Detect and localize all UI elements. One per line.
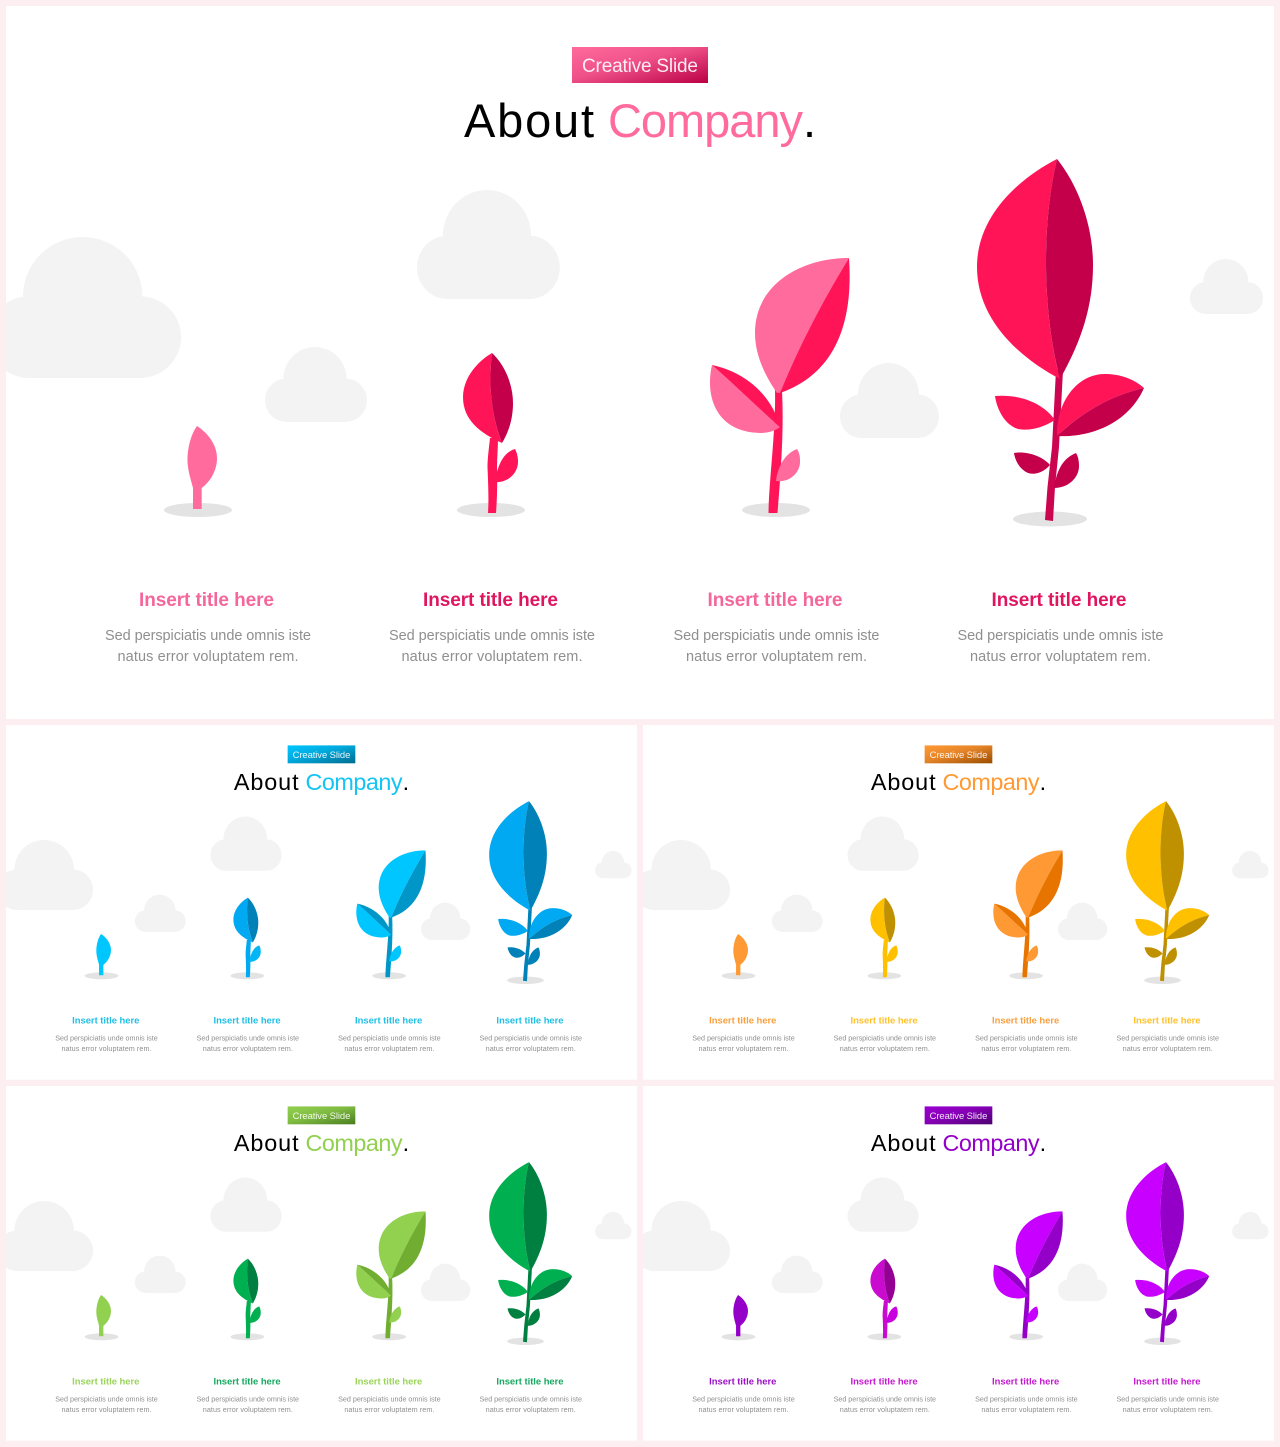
column 1 text: natus error voluptatem rem.: [698, 1405, 789, 1414]
column 2 text: [389, 590, 595, 665]
column 2 text: Sed perspiciatis unde omnis iste: [834, 1033, 936, 1042]
plant stage 2: [230, 898, 264, 979]
plant stage 3: [993, 1211, 1063, 1340]
column 4 text: natus error voluptatem rem.: [1123, 1405, 1213, 1414]
plant stage 4: [977, 159, 1144, 526]
column 1 text: natus error voluptatem rem.: [61, 1405, 152, 1414]
clouds: [634, 1178, 1268, 1301]
column 1 text: Sed perspiciatis unde omnis iste: [55, 1394, 158, 1403]
column 2 text: Insert title here: [213, 1016, 281, 1027]
column 1 text: Insert title here: [709, 1016, 776, 1027]
column 4 text: natus error voluptatem rem.: [1123, 1044, 1213, 1053]
plant stage 2: [867, 1259, 901, 1340]
tag: Creative Slide: [925, 1106, 992, 1124]
column 2 text: Sed perspiciatis unde omnis iste: [197, 1033, 299, 1042]
column 4 text: Insert title here: [1133, 1377, 1201, 1388]
column 2 text: natus error voluptatem rem.: [203, 1405, 293, 1414]
column 1 text: Insert title here: [72, 1016, 139, 1027]
column 2 text: Sed perspiciatis unde omnis iste: [389, 628, 595, 644]
column 3 text: natus error voluptatem rem.: [981, 1405, 1071, 1414]
clouds: [634, 817, 1268, 940]
column 4 text: natus error voluptatem rem.: [970, 649, 1151, 665]
title: About: [234, 1130, 299, 1156]
column 3 text: Insert title here: [355, 1377, 422, 1388]
column 4 text: Sed perspiciatis unde omnis iste: [958, 628, 1164, 644]
title: .: [403, 1130, 409, 1156]
column 4 text: Insert title here: [496, 1377, 564, 1388]
column 4 text: [1116, 1377, 1219, 1414]
column 4 text: [479, 1377, 582, 1414]
column 4 text: [479, 1016, 582, 1053]
column 1 text: Insert title here: [139, 590, 274, 611]
title: Company: [608, 94, 804, 147]
column 1 text: natus error voluptatem rem.: [61, 1044, 152, 1053]
column 2 text: [197, 1377, 299, 1414]
column 2 text: Insert title here: [423, 590, 558, 611]
title: [234, 1134, 407, 1156]
plant stage 1: [85, 1295, 118, 1340]
plant stage 2: [457, 353, 525, 517]
column 3 text: [975, 1377, 1078, 1414]
plant stage 4: [489, 801, 572, 984]
column 3 text: natus error voluptatem rem.: [686, 649, 867, 665]
panel: orange slide: [634, 725, 1274, 1080]
column 1 text: [55, 1016, 158, 1053]
plant stage 4: [1126, 1162, 1209, 1345]
panel: green slide: [0, 1086, 637, 1441]
plant stage 1: [164, 426, 232, 517]
column 1 text: Insert title here: [72, 1377, 139, 1388]
plant stage 2: [867, 898, 901, 979]
plant stage 2: [230, 1259, 264, 1340]
column 3 text: Insert title here: [355, 1016, 422, 1027]
column 2 text: [834, 1377, 936, 1414]
column 3 text: natus error voluptatem rem.: [981, 1044, 1071, 1053]
column 3 text: [975, 1016, 1078, 1053]
tag: Creative Slide: Creative Slide: [293, 1111, 350, 1122]
column 2 text: Sed perspiciatis unde omnis iste: [197, 1394, 299, 1403]
plant stage 3: [993, 850, 1063, 979]
tag: Creative Slide: Creative Slide: [293, 750, 350, 761]
plant stage 3: [356, 1211, 426, 1340]
panel: purple slide: [634, 1086, 1274, 1441]
clouds: [0, 190, 1263, 438]
title: Company: [306, 1130, 403, 1156]
column 2 text: natus error voluptatem rem.: [402, 649, 582, 665]
tag: Creative Slide: [572, 47, 708, 83]
column 3 text: Sed perspiciatis unde omnis iste: [338, 1033, 441, 1042]
title: About: [871, 1130, 936, 1156]
title: [871, 1130, 1046, 1156]
title: .: [803, 94, 816, 147]
column 3 text: Sed perspiciatis unde omnis iste: [975, 1033, 1078, 1042]
column 2 text: Sed perspiciatis unde omnis iste: [834, 1394, 936, 1403]
column 1 text: Sed perspiciatis unde omnis iste: [692, 1033, 795, 1042]
plant stage 4: [1126, 801, 1209, 984]
column 3 text: [674, 590, 880, 665]
tag: Creative Slide: [288, 745, 355, 763]
column 4 text: Sed perspiciatis unde omnis iste: [479, 1394, 582, 1403]
column 3 text: Sed perspiciatis unde omnis iste: [338, 1394, 441, 1403]
plant stage 3: [710, 258, 850, 517]
column 3 text: Sed perspiciatis unde omnis iste: [674, 628, 880, 644]
plant stage 1: [722, 1295, 755, 1340]
column 1 text: [55, 1377, 158, 1414]
title: Company: [306, 769, 403, 795]
title: About: [464, 94, 594, 147]
column 3 text: natus error voluptatem rem.: [344, 1405, 434, 1414]
column 2 text: Insert title here: [213, 1377, 281, 1388]
panel: pink main slide: [0, 6, 1274, 719]
column 3 text: [338, 1016, 441, 1053]
clouds: [0, 817, 631, 940]
column 1 text: [692, 1016, 795, 1053]
tag: Creative Slide: Creative Slide: [582, 56, 698, 77]
plant stage 4: [489, 1162, 572, 1345]
title: [871, 773, 1044, 795]
column 1 text: Sed perspiciatis unde omnis iste: [692, 1394, 795, 1403]
title: About: [234, 769, 299, 795]
column 2 text: Insert title here: [850, 1377, 918, 1388]
column 1 text: Sed perspiciatis unde omnis iste: [55, 1033, 158, 1042]
column 3 text: Insert title here: [992, 1016, 1059, 1027]
tag: Creative Slide: [288, 1106, 355, 1124]
column 2 text: natus error voluptatem rem.: [203, 1044, 293, 1053]
column 3 text: [338, 1377, 441, 1414]
column 3 text: Sed perspiciatis unde omnis iste: [975, 1394, 1078, 1403]
column 3 text: Insert title here: [992, 1377, 1059, 1388]
column 2 text: Insert title here: [850, 1016, 918, 1027]
column 2 text: natus error voluptatem rem.: [840, 1044, 930, 1053]
tag: Creative Slide: Creative Slide: [930, 1111, 987, 1122]
column 2 text: [834, 1016, 936, 1053]
column 4 text: [1116, 1016, 1219, 1053]
plant stage 1: [85, 934, 118, 979]
tag: Creative Slide: [925, 745, 992, 763]
column 3 text: natus error voluptatem rem.: [344, 1044, 434, 1053]
column 4 text: [958, 590, 1164, 665]
column 1 text: Insert title here: [709, 1377, 776, 1388]
column 4 text: Insert title here: [496, 1016, 564, 1027]
title: .: [403, 769, 409, 795]
title: Company: [943, 1130, 1040, 1156]
column 3 text: Insert title here: [708, 590, 842, 611]
column 2 text: [197, 1016, 299, 1053]
column 4 text: Sed perspiciatis unde omnis iste: [1116, 1394, 1219, 1403]
column 1 text: natus error voluptatem rem.: [698, 1044, 789, 1053]
column 4 text: Insert title here: [1133, 1016, 1201, 1027]
plant stage 1: [722, 934, 755, 979]
column 4 text: natus error voluptatem rem.: [486, 1405, 576, 1414]
clouds: [0, 1178, 631, 1301]
column 1 text: natus error voluptatem rem.: [118, 649, 298, 665]
tag: Creative Slide: Creative Slide: [930, 750, 987, 761]
column 1 text: Sed perspiciatis unde omnis iste: [105, 628, 311, 644]
column 1 text: [692, 1377, 795, 1414]
title: .: [1040, 769, 1046, 795]
title: Company: [943, 769, 1040, 795]
panel: blue slide: [0, 725, 637, 1080]
column 1 text: [105, 590, 311, 665]
column 2 text: natus error voluptatem rem.: [840, 1405, 930, 1414]
title: [234, 773, 407, 795]
title: [464, 102, 812, 147]
column 4 text: Sed perspiciatis unde omnis iste: [1116, 1033, 1219, 1042]
column 4 text: Sed perspiciatis unde omnis iste: [479, 1033, 582, 1042]
title: .: [1040, 1130, 1046, 1156]
title: About: [871, 769, 936, 795]
column 4 text: natus error voluptatem rem.: [486, 1044, 576, 1053]
column 4 text: Insert title here: [992, 590, 1126, 611]
plant stage 3: [356, 850, 426, 979]
